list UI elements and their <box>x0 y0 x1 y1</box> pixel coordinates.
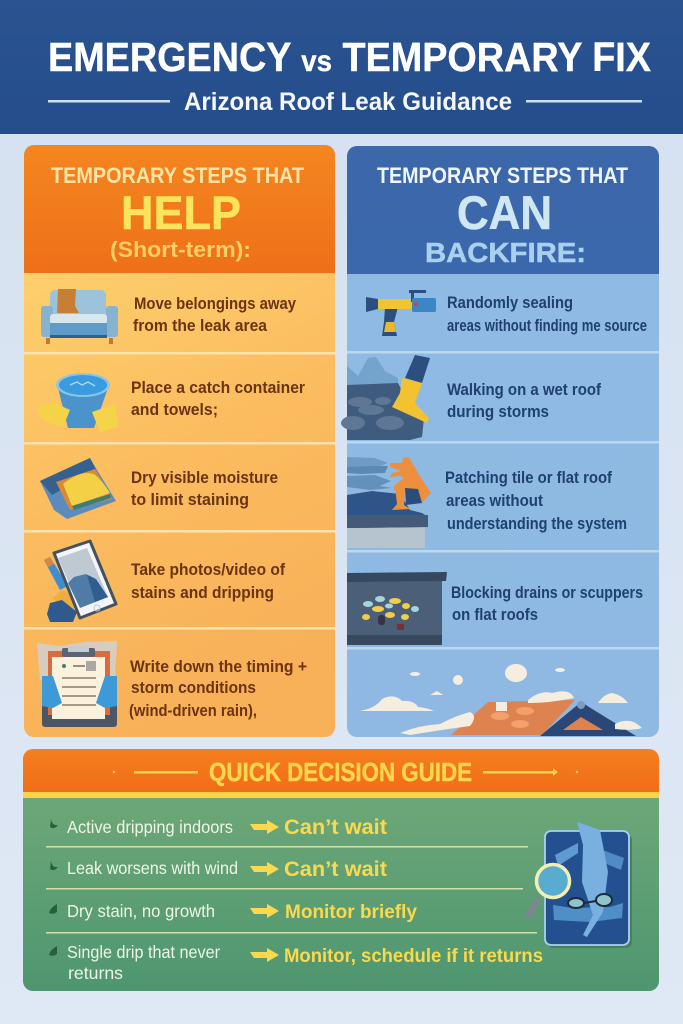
decision row: single drip <box>49 942 543 983</box>
decision row: dry stain: Dry stain, no growth <box>67 901 215 921</box>
text <box>451 583 643 624</box>
text: Place a catch container <box>131 378 305 397</box>
step: blocking drains <box>347 572 643 645</box>
text: Patching tile or flat roof <box>445 468 612 487</box>
subtitle: Arizona Roof Leak Guidance <box>184 88 512 116</box>
step: catch container <box>38 373 305 432</box>
text <box>131 378 305 419</box>
icon: caulk gun <box>366 290 436 336</box>
decision row: active dripping: Active dripping indoors <box>67 817 233 837</box>
panel heading: TEMPORARY STEPS THAT <box>377 163 628 188</box>
panel: temporary steps that can backfire <box>341 146 659 737</box>
glasses <box>568 894 612 908</box>
decision row: dry stain: Monitor briefly <box>285 902 417 923</box>
icon: bucket and towels <box>38 373 118 432</box>
text <box>133 294 296 335</box>
icon: folded towels <box>40 458 116 519</box>
text: from the leak area <box>133 316 267 335</box>
icon: worker on roof <box>347 457 431 548</box>
header banner <box>0 0 683 134</box>
decision row: leak worsens: Can’t wait <box>284 858 387 881</box>
step: patching tile <box>347 457 627 548</box>
panel heading: BACKFIRE: <box>425 237 586 268</box>
text: Dry visible moisture <box>131 468 278 487</box>
text: areas without <box>446 491 543 510</box>
icon: sofa <box>41 289 118 344</box>
text <box>445 468 627 533</box>
magnifier <box>529 864 570 915</box>
text: stains and dripping <box>131 583 274 602</box>
decision row: leak worsens: Leak worsens with wind <box>67 858 238 878</box>
decision row: active dripping: Can’t wait <box>284 816 387 839</box>
text <box>447 380 601 421</box>
text <box>447 293 647 335</box>
panel heading: CAN <box>457 186 552 239</box>
panel heading: HELP <box>121 186 241 239</box>
heading bar: QUICK DECISION GUIDE <box>209 757 472 787</box>
panel body <box>347 268 659 737</box>
step: walking on wet roof <box>341 355 601 440</box>
step: random sealing <box>366 290 647 336</box>
text: Blocking drains or scuppers <box>451 583 643 602</box>
text: to limit staining <box>131 490 249 509</box>
decision row: single drip: returns <box>68 963 123 983</box>
text: Move belongings away <box>134 294 296 313</box>
illustration: storm damaged roof <box>360 664 642 736</box>
panel body <box>23 785 659 991</box>
panel heading <box>24 145 335 273</box>
text <box>129 657 307 720</box>
decision row: dry stain <box>49 901 417 923</box>
panel heading <box>347 146 659 274</box>
text: Randomly sealing <box>447 293 573 312</box>
icon: boot on roof <box>341 355 430 440</box>
title: EMERGENCY vs TEMPORARY FIX <box>48 34 651 80</box>
panel heading: TEMPORARY STEPS THAT <box>51 163 304 188</box>
decision row: active dripping <box>50 816 387 839</box>
text: storm conditions <box>131 678 256 697</box>
text: during storms <box>447 402 549 421</box>
text: Walking on a wet roof <box>447 380 601 399</box>
text <box>131 560 285 602</box>
text: and towels; <box>131 400 218 419</box>
heading bar <box>23 749 659 798</box>
step: dry moisture <box>40 458 278 519</box>
panel: quick decision guide <box>23 749 659 991</box>
text <box>131 468 278 509</box>
icon: blocked drain wall <box>347 572 447 645</box>
panel: temporary steps that help <box>24 145 335 737</box>
panel body <box>24 268 335 737</box>
text: on flat roofs <box>452 605 538 624</box>
text: Take photos/video of <box>131 560 285 579</box>
decision row: leak worsens <box>50 858 387 881</box>
decision row: single drip: Monitor, schedule if it returns <box>284 946 543 967</box>
icon: phone in hand <box>44 541 116 622</box>
icon: clipboard <box>37 641 117 727</box>
decision row: single drip: Single drip that never <box>67 942 220 962</box>
panel heading: (Short-term): <box>110 237 251 262</box>
icon: inspection card with magnifier <box>529 822 632 948</box>
step: take photos <box>44 541 285 622</box>
text: Write down the timing + <box>130 657 307 676</box>
step: write down <box>37 641 307 727</box>
text: understanding the system <box>447 514 627 533</box>
step: move belongings <box>41 289 296 344</box>
text: (wind-driven rain), <box>129 701 257 720</box>
